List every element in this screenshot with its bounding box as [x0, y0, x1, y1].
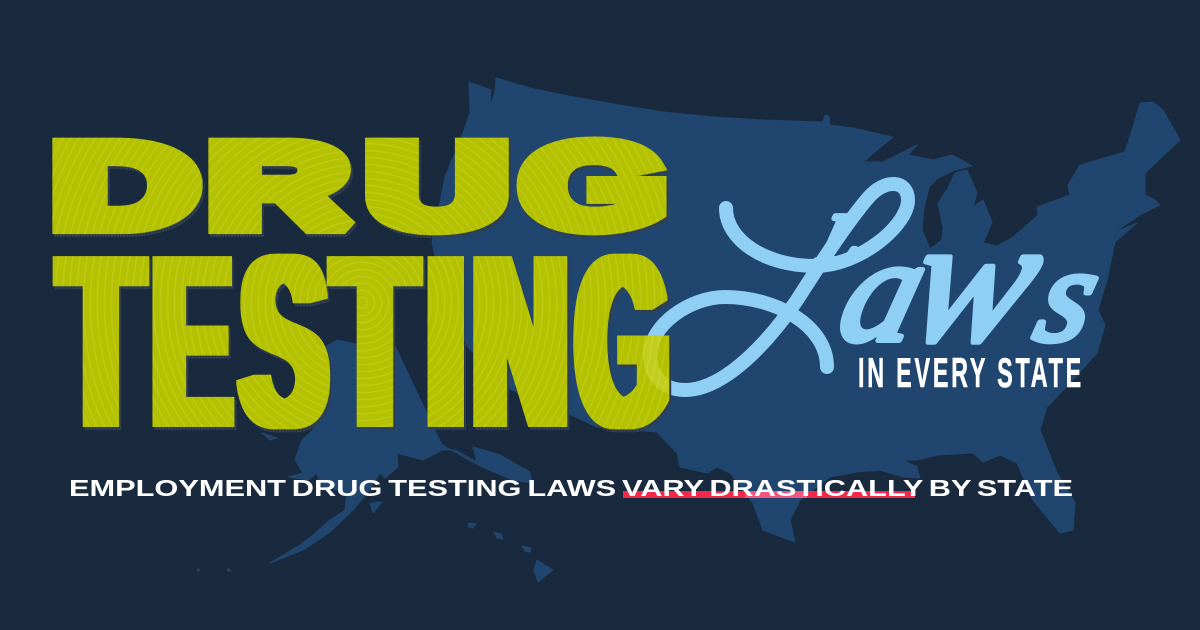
title word: TESTING: I	[427, 204, 464, 478]
title word: TESTING	[60, 204, 668, 478]
title word: TESTING: T	[60, 204, 142, 478]
swash of the letter L	[650, 184, 908, 390]
title word: TESTING: S	[241, 204, 327, 478]
highlight underline	[623, 491, 915, 498]
title word: TESTING: T	[334, 204, 416, 478]
title word: DRUG: D	[52, 121, 198, 252]
lettering: Laws: a	[825, 207, 944, 373]
title word: TESTING: N	[473, 204, 568, 478]
title word: TESTING: G	[577, 204, 668, 478]
fingerprint ring texture on title	[52, 136, 670, 430]
title word: DRUG: G	[521, 121, 666, 252]
map: Alaska	[270, 340, 532, 563]
map: Alaskan and Hawaiian islands	[197, 433, 553, 582]
lettering: Laws: w	[890, 180, 1064, 379]
title words	[52, 121, 668, 478]
title word: TESTING: E	[153, 204, 230, 478]
lettering: Laws: s	[1023, 220, 1116, 369]
lettering: Laws: L	[811, 201, 871, 278]
map: contiguous states	[432, 78, 1180, 542]
subtitle: EMPLOYMENT DRUG TESTING LAWS VARY DRASTICALLY BY STATE	[69, 475, 1073, 501]
title: Drug Testing	[52, 136, 672, 432]
title word: DRUG: R	[208, 121, 349, 252]
title word: DRUG: U	[366, 121, 508, 252]
map: United States	[197, 78, 1180, 582]
title shadow	[54, 140, 672, 432]
script word: Laws	[650, 180, 1126, 390]
